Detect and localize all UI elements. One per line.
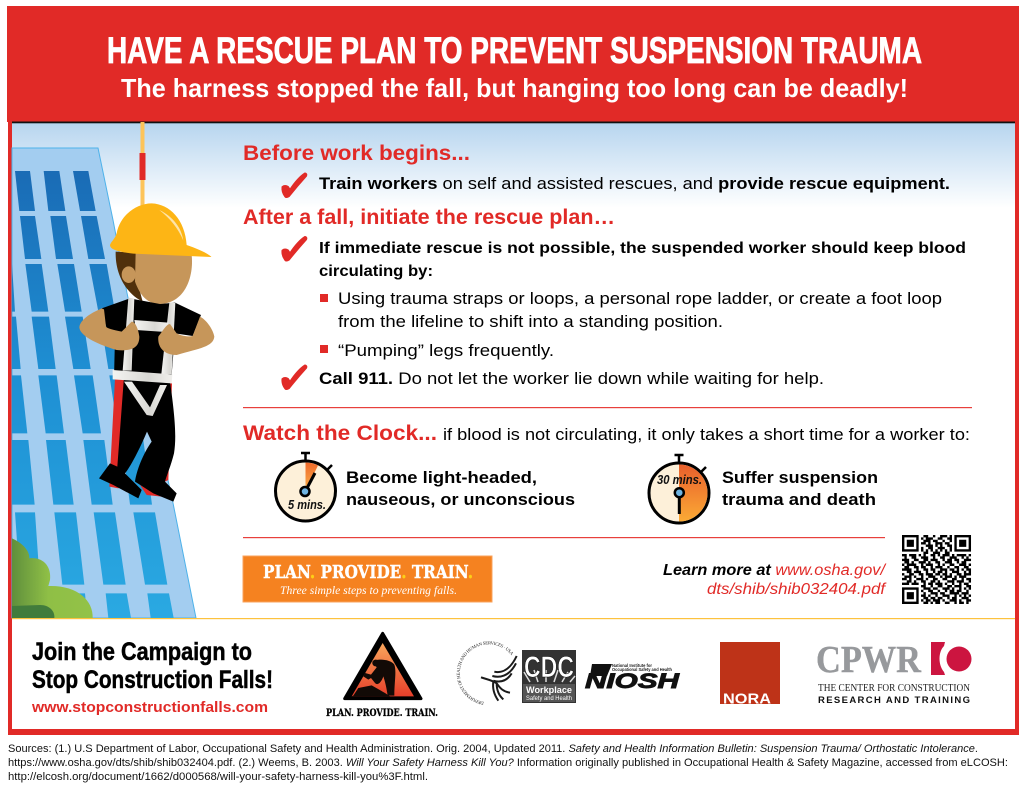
item text second line: circulating by: (319, 263, 433, 280)
logo: HHS eagle: DEPARTMENT OF HEALTH AND HUMAN SERVICES · USA (456, 641, 513, 705)
check mark (282, 366, 306, 389)
triangle fill (352, 643, 414, 696)
text: 30 minutes effect: Suffer suspension (722, 468, 878, 487)
stopwatch: 5 minutes: 5 mins. (288, 498, 326, 512)
lifeline behind the legs (109, 378, 172, 497)
badge: plan provide train: Three simple steps to preventing falls. (280, 585, 457, 597)
bullet text second line: from the lifeline to shift into a standing position. (338, 313, 723, 331)
ear (122, 266, 136, 283)
stopwatch: 30 minutes: 30 mins. (657, 473, 702, 487)
QR code (902, 535, 971, 604)
worker silhouette (352, 660, 395, 696)
item text: If immediate rescue is not possible, the suspended worker should keep blood (319, 240, 966, 257)
learn more link (663, 562, 887, 598)
bullet (320, 294, 328, 302)
heading: Watch the Clock... (243, 422, 437, 445)
logo: CDC workplace safety and health: CDC (524, 651, 574, 684)
hard hat (110, 203, 212, 257)
item text: Call 911. Do not let the worker lie down while waiting for help. (319, 370, 824, 388)
bullet text: “Pumping” legs frequently. (338, 342, 554, 360)
bullet text: Using trauma straps or loops, a personal rope ladder, or create a foot loop (338, 290, 942, 308)
section: before work begins (243, 142, 950, 197)
logo: CPWR (816, 639, 972, 706)
campaign heading (32, 638, 273, 694)
divider (243, 407, 972, 408)
sources: Sources: (1.) U.S Department of Labor, Occupational Safety and Health Administration. Orig. 2004, Updated 2011. Safety and Health Information Bulletin: Suspension Trauma/ Orthostatic Intolerance. (8, 743, 978, 755)
sky gradient background (12, 123, 1015, 208)
logo: plan provide train triangle (326, 633, 438, 719)
logo: NORA: NORA (723, 690, 771, 708)
section: after a fall (243, 206, 966, 389)
badge: plan provide train: PLAN. PROVIDE. TRAIN. (263, 562, 473, 583)
heading: After a fall, initiate the rescue plan… (243, 206, 615, 229)
stopwatch: 5 minutes (276, 453, 336, 521)
illustration: bush (12, 538, 93, 618)
logo: NIOSH: National Institute for (612, 663, 652, 669)
campaign heading: Stop Construction Falls! (32, 666, 273, 694)
text: 5 minutes effect: Become light-headed, (346, 468, 537, 487)
text: 5 minutes effect (346, 468, 575, 509)
header banner (7, 6, 1019, 123)
right arm (158, 317, 214, 355)
illustration: suspended worker (79, 203, 214, 502)
item text: Train workers on self and assisted rescues, and provide rescue equipment. (319, 175, 950, 193)
logo: NORA (720, 642, 780, 708)
triangle outline (345, 633, 421, 699)
bullet (320, 345, 328, 353)
check mark (282, 174, 306, 197)
logo: CDC workplace safety and health: Workplace (526, 685, 572, 695)
divider (243, 537, 885, 538)
sources: https://www.osha.gov/dts/shib/shib032404.pdf. (2.) Weems, B. 2003. Will Your Safety Harness Kill You? Information originally published in Occupational Health & Safety Magazine, accessed from eLCOSH: (8, 757, 1008, 769)
campaign url: www.stopconstructionfalls.com (31, 699, 268, 716)
hair (116, 252, 143, 302)
logo: NIOSH: Occupational Safety and Health (612, 667, 672, 673)
hard hat highlight (159, 210, 183, 241)
sources: http://elcosh.org/document/1662/d000568/will-your-safety-harness-kill-you%3F.html. (8, 771, 428, 783)
logo: NIOSH (585, 663, 680, 693)
footer divider (12, 618, 1015, 619)
logo: NIOSH: NIOSH (585, 670, 680, 693)
learn more link: dts/shib/shib032404.pdf (707, 581, 887, 598)
logo: CDC workplace safety and health: Safety and Health (526, 696, 572, 702)
legs and boots (99, 377, 177, 502)
subtitle: The harness stopped the fall, but hanging too long can be deadly! (121, 73, 908, 103)
badge: plan provide train (243, 556, 492, 602)
text: 5 minutes effect: nauseous, or unconscious (346, 490, 575, 509)
heading: Before work begins... (243, 142, 470, 165)
text: 30 minutes effect: trauma and death (722, 490, 876, 509)
shirt (102, 298, 201, 378)
stopwatch: 30 minutes (649, 455, 709, 523)
logo: CPWR: CPWR (816, 639, 921, 681)
illustration: building (7, 148, 196, 618)
check mark (282, 237, 306, 260)
campaign heading: Join the Campaign to (32, 638, 252, 666)
left arm (79, 308, 139, 350)
heading continuation: if blood is not circulating, it only takes a short time for a worker to: (443, 426, 970, 444)
logo caption: PLAN. PROVIDE. TRAIN. (326, 708, 438, 719)
section: watch the clock (243, 422, 970, 523)
logo: CDC workplace safety and health (522, 650, 576, 703)
illustration: bush shadow (12, 605, 54, 618)
sources (8, 743, 1008, 783)
logo: CPWR: RESEARCH AND TRAINING (818, 695, 970, 706)
logo: CPWR: THE CENTER FOR CONSTRUCTION (818, 683, 970, 694)
campaign call to action (31, 638, 273, 716)
harness (113, 298, 175, 416)
illustration: rope (140, 122, 146, 207)
face (135, 252, 192, 304)
learn more link: Learn more at www.osha.gov/ (663, 562, 887, 579)
text: 30 minutes effect (722, 468, 878, 509)
